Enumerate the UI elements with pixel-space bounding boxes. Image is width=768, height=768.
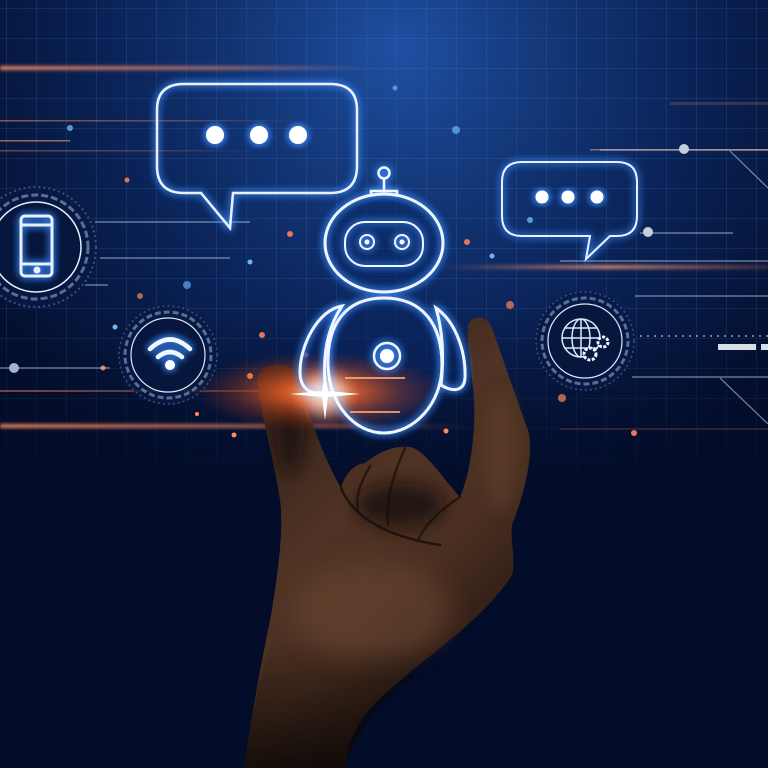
icon: smartphone badge — [0, 185, 98, 309]
robot face — [345, 222, 423, 266]
typing dots — [206, 126, 307, 144]
speech bubble: small — [502, 162, 637, 259]
finger creases — [341, 448, 460, 545]
icon: wifi badge — [118, 305, 218, 405]
robot right arm — [436, 308, 465, 390]
robot interior tint — [300, 194, 465, 433]
robot body — [328, 298, 442, 433]
palm highlight — [290, 560, 450, 660]
robot left arm — [300, 306, 342, 393]
icon: globe and gears badge — [535, 291, 635, 391]
orange light streaks — [0, 66, 768, 430]
thumb highlight — [484, 390, 516, 510]
robot chatbot — [300, 168, 465, 433]
typing dots — [536, 190, 604, 204]
speech bubble: large — [157, 84, 357, 228]
robot antenna — [371, 168, 397, 196]
fingertip light flare — [290, 372, 405, 420]
hand — [245, 317, 530, 768]
robot chest light — [374, 343, 400, 369]
robot head — [325, 194, 443, 292]
curled finger shadows — [276, 385, 445, 527]
connector lines and nodes — [0, 144, 768, 424]
particles — [67, 86, 637, 438]
orange flare around fingertip — [195, 352, 445, 432]
